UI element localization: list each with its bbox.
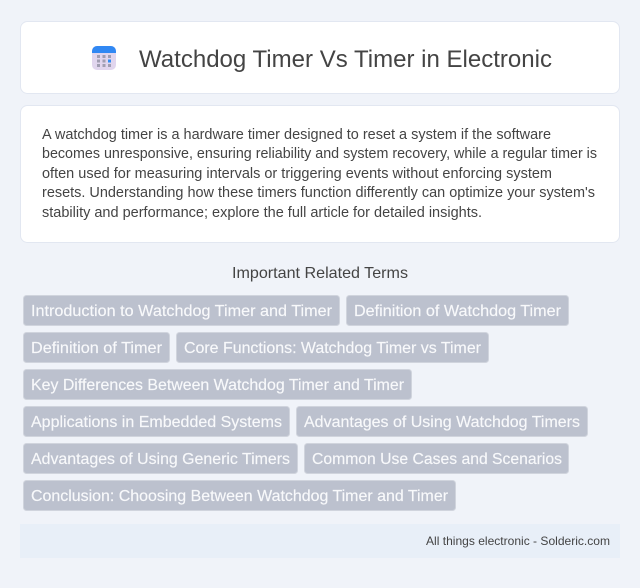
tag: common use cases — [304, 444, 568, 474]
tag: advantages of generic timers — [24, 444, 298, 474]
tag: definition of timer: Definition of Timer — [31, 340, 163, 357]
tag: definition of watchdog timer — [346, 296, 568, 326]
tag: definition of timer — [24, 332, 170, 362]
icon: calendar — [92, 46, 116, 70]
panel: description — [20, 106, 620, 242]
tag: introduction — [24, 296, 340, 326]
tag: advantages of watchdog timers: Advantages of Using Watchdog Timers — [304, 414, 580, 431]
tag: core functions: Core Functions: Watchdog Timer vs Timer — [184, 340, 482, 357]
tag: advantages of generic timers: Advantages of Using Generic Timers — [31, 451, 290, 468]
tag: common use cases: Common Use Cases and Scenarios — [312, 451, 562, 468]
tag: applications — [24, 406, 290, 436]
tag: applications: Applications in Embedded Systems — [31, 414, 282, 431]
tag: definition of watchdog timer: Definition of Watchdog Timer — [354, 303, 562, 320]
text block: description: A watchdog timer is a hardware timer designed to reset a system if the software — [42, 127, 551, 143]
tag: key differences — [24, 370, 412, 400]
panel: header — [20, 22, 620, 94]
heading: related terms: Important Related Terms — [232, 265, 408, 282]
title: Watchdog Timer Vs Timer in Electronic — [139, 46, 552, 73]
tag: advantages of watchdog timers — [296, 406, 588, 436]
tag: key differences: Key Differences Between Watchdog Timer and Timer — [31, 377, 405, 394]
tag: conclusion: Conclusion: Choosing Between Watchdog Timer and Timer — [31, 488, 449, 505]
text block: description: often used for measuring intervals or triggering events without enforcing system — [42, 166, 552, 182]
text block: description: becomes unresponsive, ensuring reliability and system recovery, while a regular timer is — [42, 146, 597, 162]
tag: core functions — [176, 332, 488, 362]
text block: description: resets. Understanding how these timers function differently can optimize your system's — [42, 185, 595, 201]
text block: description: stability and performance; explore the full article for detailed insights. — [42, 205, 482, 221]
tag: introduction: Introduction to Watchdog Timer and Timer — [31, 303, 333, 320]
tag list — [24, 296, 588, 510]
text block: description — [42, 127, 597, 221]
footer — [20, 524, 620, 558]
tag: conclusion — [24, 480, 456, 510]
footer text: All things electronic - Solderic.com — [426, 534, 610, 548]
